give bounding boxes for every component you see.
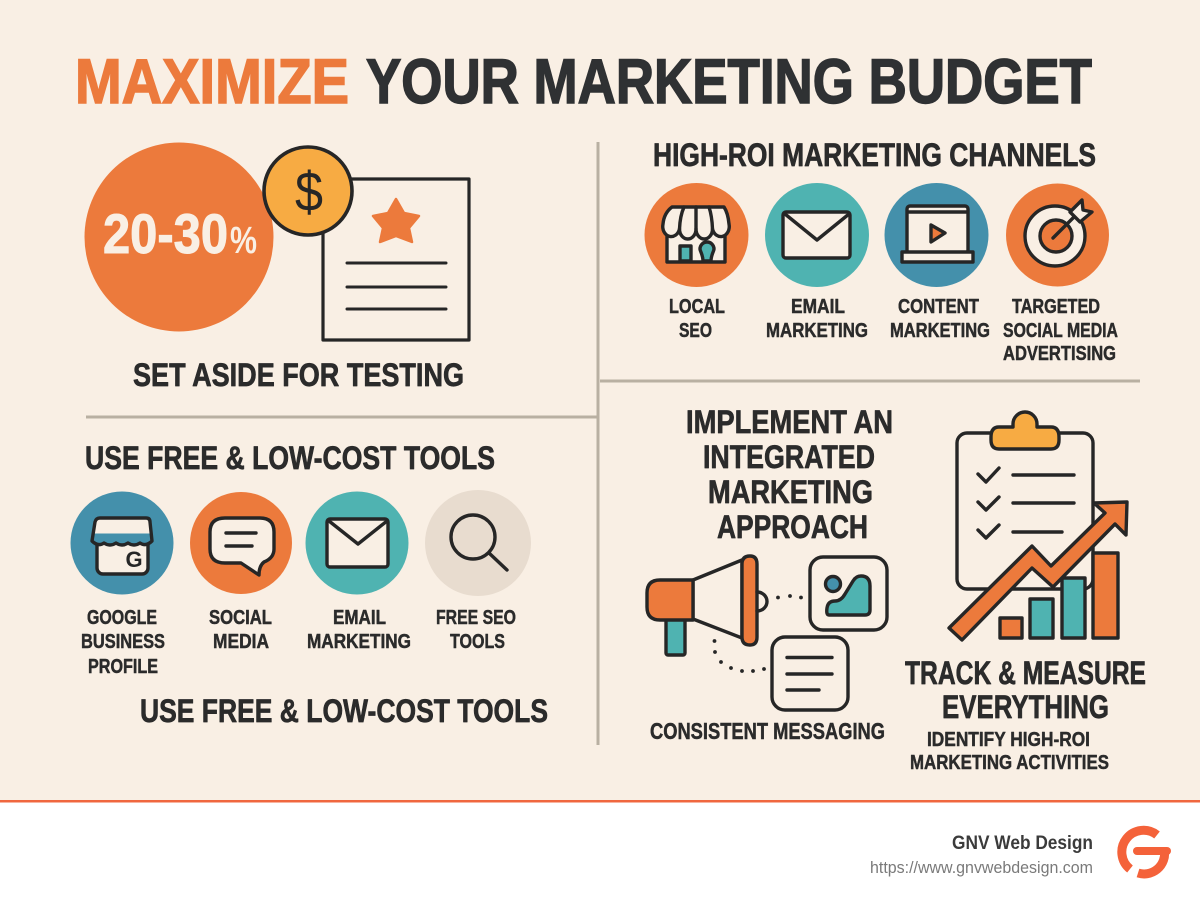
label: email marketing [307,606,411,653]
label: Google Business Profile [81,606,165,678]
caption: identify high-ROI marketing activities [910,728,1109,774]
label: social media: SOCIAL [209,606,272,629]
logo: G mark [1122,830,1167,874]
label: targeted social media advertising: TARGETED [1012,295,1100,318]
label: social media [209,606,272,653]
panel: high-ROI channels [644,137,1118,365]
panel: free and low-cost tools [70,440,548,729]
icon: dollar coin [264,147,352,235]
icon: Google Business Profile store [70,492,174,594]
label: local SEO [669,295,725,342]
label: email marketing: MARKETING [766,319,868,342]
label: Google Business Profile: BUSINESS [81,630,165,653]
panel: track and measure [905,412,1146,774]
arrow: growth [949,502,1127,640]
icon: dollar coin: $ [295,160,323,223]
badge: 20-30% [84,142,274,332]
panel: testing budget [84,142,469,393]
icon: Google Business Profile store: G [125,547,143,572]
label: email marketing [766,295,868,342]
icon: email envelope [306,492,408,594]
label: local SEO: SEO [679,319,712,342]
heading: implement an integrated marketing approach: INTEGRATED [703,439,875,475]
heading: implement an integrated marketing approach: IMPLEMENT AN [686,404,893,440]
label: targeted social media advertising: ADVERTISING [1003,342,1116,365]
label: email marketing: EMAIL [791,295,845,318]
label: email marketing: MARKETING [307,630,411,653]
icon: email envelope [765,183,869,287]
caption: identify high-ROI marketing activities: IDENTIFY HIGH-ROI [927,728,1090,751]
heading: track and measure everything [905,655,1146,725]
heading: implement an integrated marketing approach: MARKETING [708,474,873,510]
label: free SEO tools: TOOLS [450,630,505,653]
icon: content laptop with play [884,183,988,287]
label: Google Business Profile: GOOGLE [87,606,157,629]
caption: use free and low-cost tools: USE FREE & LOW-COST TOOLS [140,693,548,729]
icon: target with arrow [1006,184,1109,286]
badge: 20-30%: 20-30 [103,202,228,265]
label: free SEO tools: FREE SEO [436,606,516,629]
badge: 20-30%: % [230,220,257,262]
connector dots [713,594,803,673]
label: targeted social media advertising [1003,295,1118,365]
label: content marketing: CONTENT [898,295,979,318]
label: email marketing: EMAIL [333,606,386,629]
caption: set aside for testing: SET ASIDE FOR TESTING [133,357,464,393]
icon: text card [772,637,848,710]
icon: image card [810,557,887,630]
caption: consistent messaging: CONSISTENT MESSAGING [650,718,885,744]
heading: implement an integrated marketing approach [686,404,893,545]
panel: integrated marketing approach [647,404,893,744]
icon: clipboard checklist [957,412,1093,589]
label: Google Business Profile: PROFILE [88,655,158,678]
label: targeted social media advertising: SOCIAL MEDIA [1003,319,1118,342]
footer url: https://www.gnvwebdesign.com [870,859,1093,877]
caption: identify high-ROI marketing activities: MARKETING ACTIVITIES [910,751,1109,774]
title: MAXIMIZE [75,47,349,117]
icon: megaphone [647,556,767,655]
icon: free SEO magnifier [425,490,531,596]
title [75,47,1092,117]
icon: social media chat bubble [190,492,292,594]
label: content marketing: MARKETING [890,319,990,342]
label: social media: MEDIA [213,630,269,653]
icon: document with star [323,179,469,340]
label: free SEO tools [436,606,516,653]
heading: implement an integrated marketing approach: APPROACH [717,509,868,545]
icon: local SEO storefront [644,183,748,287]
chart: rising bars [1000,553,1118,638]
label: content marketing [890,295,990,342]
heading: high-ROI marketing channels: HIGH-ROI MARKETING CHANNELS [653,137,1096,173]
footer name: GNV Web Design [952,833,1093,854]
label: local SEO: LOCAL [669,295,725,318]
heading: use free and low-cost tools: USE FREE & LOW-COST TOOLS [85,440,495,476]
heading: track and measure everything: EVERYTHING [942,689,1109,725]
footer brand [870,830,1167,877]
